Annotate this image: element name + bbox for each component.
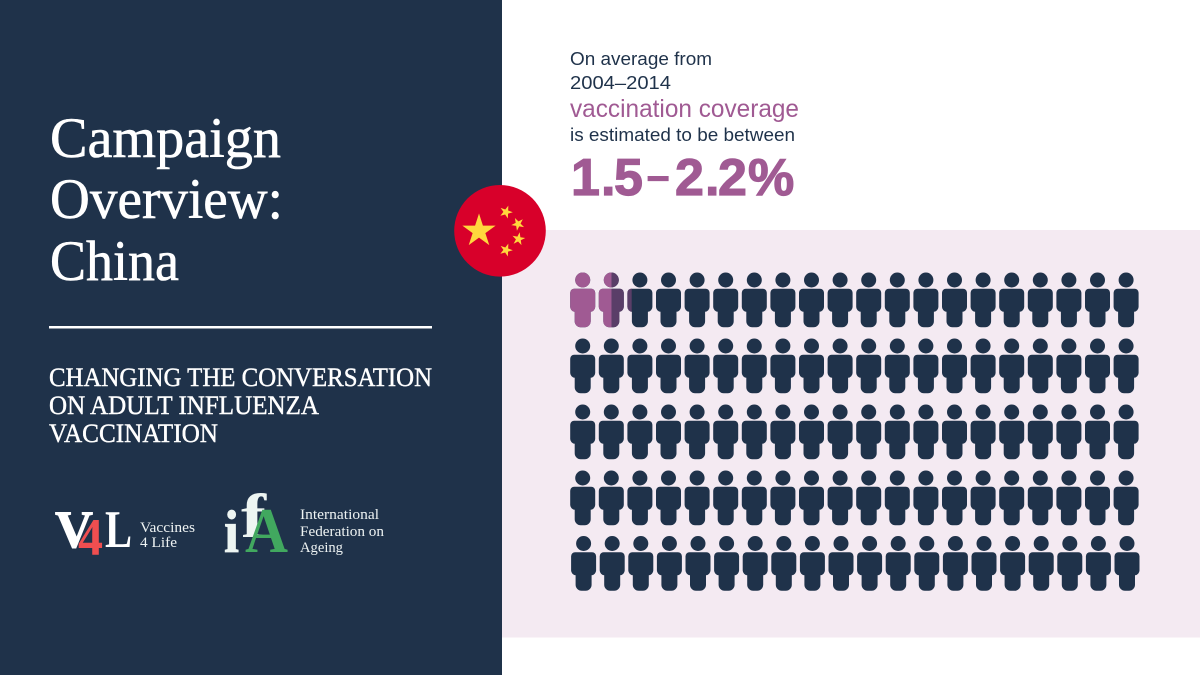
pictogram chart: 100 people, about 2 highlighted [570,272,1140,591]
subtitle [49,363,432,448]
text block: coverage statement: vaccination coverage [570,95,799,123]
text block: coverage statement: 2004–2014 [570,72,671,93]
logo: International Federation on Ageing: Ageing [300,540,343,556]
subtitle: CHANGING THE CONVERSATION [49,363,432,392]
subtitle: VACCINATION [49,419,218,448]
logo: Vaccines 4 Life: V [55,501,93,559]
logo: International Federation on Ageing: International [300,507,379,523]
logo: International Federation on Ageing [224,483,384,566]
statistic: 1.5–2.2%: 2.2% [675,149,794,207]
logo: International Federation on Ageing: i [224,499,239,565]
logo: Vaccines 4 Life: 4 [78,509,103,567]
title divider rule [49,326,432,328]
text block: coverage statement [570,48,799,207]
logo: Vaccines 4 Life: Vaccines [140,520,195,536]
title [50,107,283,293]
text block: coverage statement: On average from [570,48,712,69]
logo: Vaccines 4 Life [55,501,195,567]
logo: Vaccines 4 Life: 4 Life [140,535,177,551]
subtitle: ON ADULT INFLUENZA [49,391,319,420]
statistic: 1.5–2.2%: – [647,154,669,198]
logo: International Federation on Ageing: A [245,495,288,566]
statistic: 1.5–2.2%: 1.5 [571,149,643,207]
panel: left navy background [0,0,502,675]
title: Campaign [50,107,281,170]
title: Overview: [50,168,283,231]
panel: pink pictogram background [502,230,1200,638]
logo: Vaccines 4 Life: L [105,501,132,559]
highlighted people: vaccinated share [570,272,632,328]
logo: International Federation on Ageing: Federation on [300,524,384,540]
title: China [50,230,179,293]
logo: International Federation on Ageing: f [241,483,268,551]
text block: coverage statement: is estimated to be between [570,124,795,145]
icon: China flag badge [454,185,546,277]
